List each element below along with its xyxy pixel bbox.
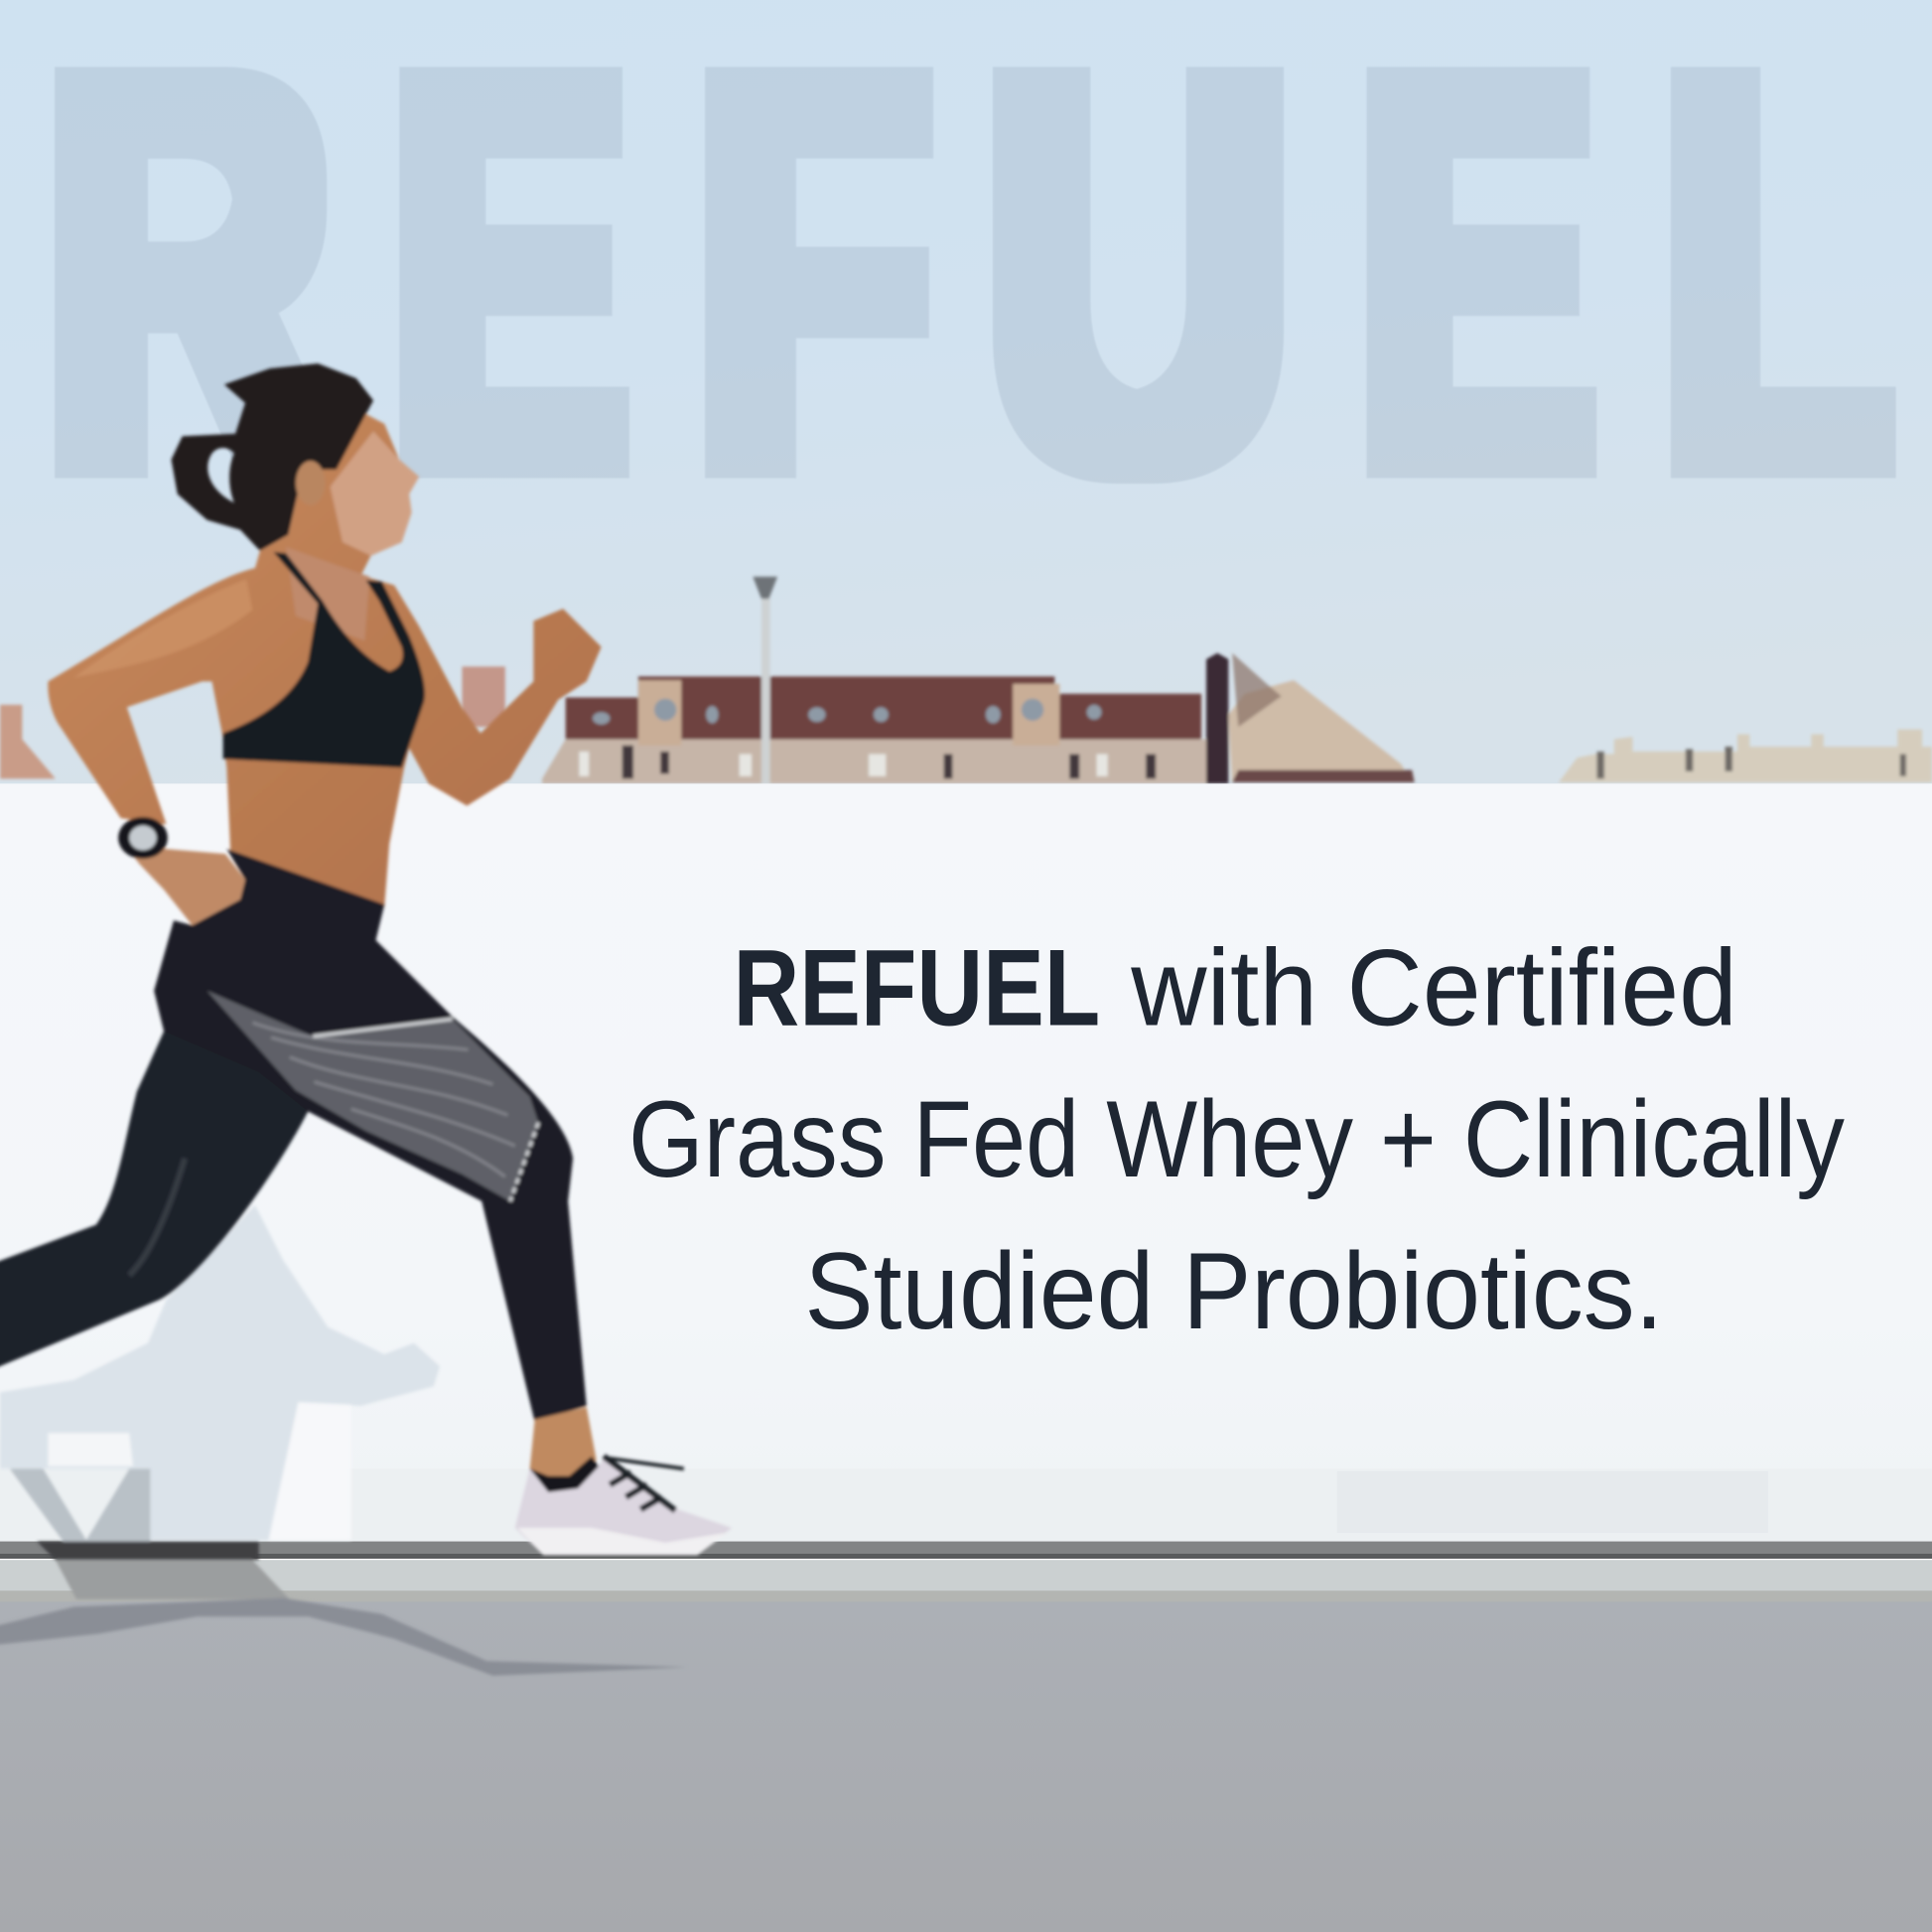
main building roof and facade <box>566 676 1201 746</box>
skin: neck, torso and shoulders <box>48 414 602 906</box>
background buildings <box>0 577 1932 783</box>
slogan text block: with Certified <box>1130 928 1737 1049</box>
hair <box>172 363 373 551</box>
left brick building <box>0 705 56 778</box>
ankle <box>530 1407 597 1491</box>
runner <box>0 363 732 1555</box>
leggings, front leg <box>154 849 587 1422</box>
background: white wall <box>0 783 1932 1545</box>
runner's cast shadow on wall and road <box>0 1205 688 1676</box>
gable building <box>1228 680 1412 782</box>
hand on hip <box>121 839 245 925</box>
back leg <box>0 1023 308 1371</box>
sports bra <box>223 552 425 767</box>
watch <box>118 817 168 859</box>
legging stripe panel <box>207 991 538 1201</box>
slogan text block <box>628 928 1845 1352</box>
lamp post <box>753 577 777 783</box>
shoe <box>515 1456 732 1555</box>
watermark heading: REFUEL <box>47 0 1889 582</box>
chimney <box>1206 653 1228 783</box>
curb and road <box>0 1542 1932 1932</box>
ear <box>296 461 326 505</box>
line 3: Studied Probiotics. <box>804 1231 1663 1352</box>
background: sky <box>0 0 1932 788</box>
line 1: REFUEL <box>733 928 1100 1049</box>
wall lower band <box>0 1468 1932 1543</box>
far right buildings <box>1559 730 1932 782</box>
